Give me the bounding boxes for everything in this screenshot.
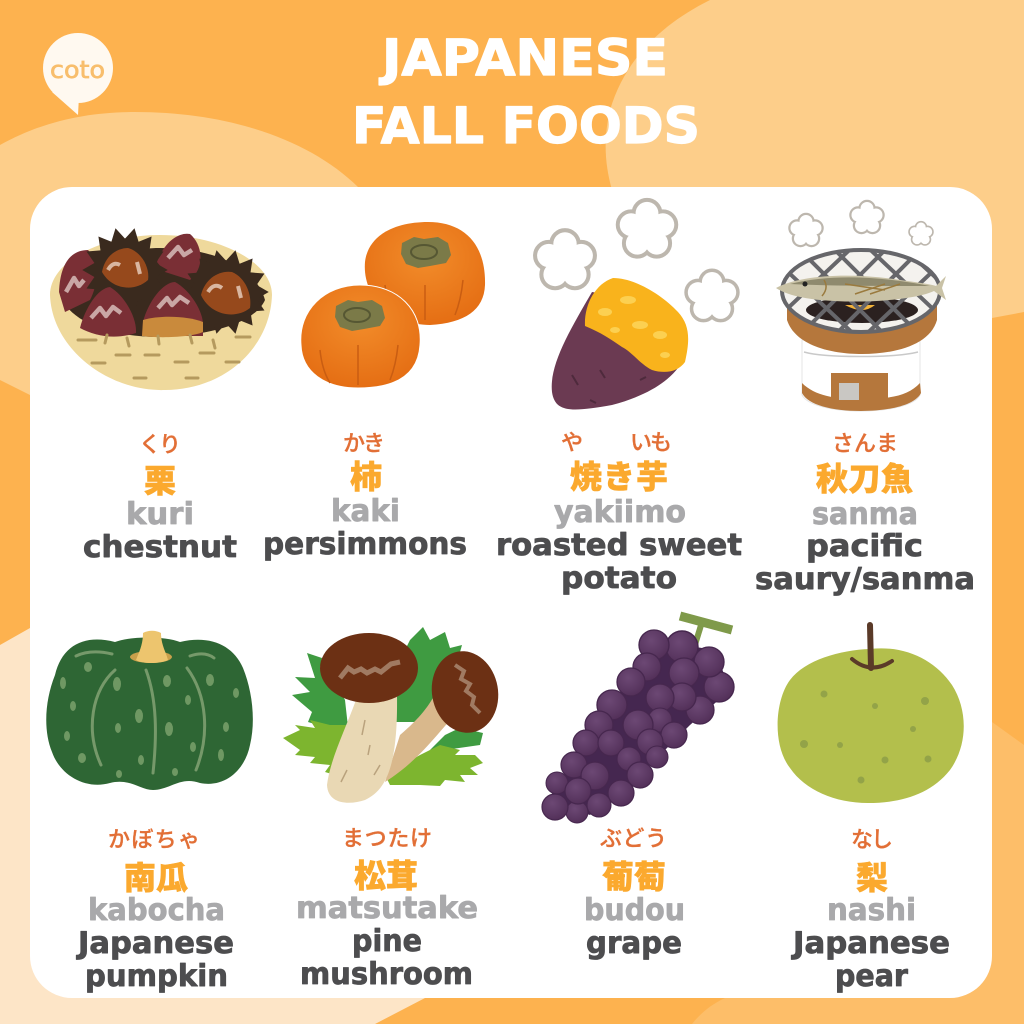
labels: sweet potato [496,430,742,596]
labels: persimmons: kaki [331,494,400,529]
icon: sweet potato with steam [537,202,736,410]
labels: grape: ぶどう [600,826,667,851]
item: pine mushroom [283,627,505,992]
labels: chestnut: くり [139,432,181,457]
labels: sweet potato: 焼き芋 [570,459,668,495]
labels: nashi: pear [835,959,908,994]
labels: matsutake: matsutake [296,891,478,926]
logo: coto speech bubble [43,33,113,115]
labels: persimmons [263,431,467,562]
labels: matsutake: まつたけ [342,826,432,851]
logo: coto speech bubble: coto [50,56,105,84]
labels: sweet potato: potato [561,561,677,596]
labels: nashi: nashi [827,893,916,928]
labels: pumpkin: pumpkin [85,959,228,994]
icon: sanma on shichirin grill [776,200,946,412]
labels: nashi: なし [851,827,893,852]
item: grape [542,616,734,961]
icon: two persimmons [301,222,485,388]
labels: grape: 葡萄 [602,859,666,895]
labels: matsutake [296,826,478,992]
icon: nashi pear [778,625,964,803]
labels: chestnut: kuri [126,497,194,532]
labels: matsutake: 松茸 [354,858,418,894]
title: FALL FOODS [352,97,700,155]
item: chestnut [50,228,272,565]
labels: sanma: sanma [812,497,918,532]
labels: sanma: さんま [832,431,898,456]
labels: pumpkin: kabocha [88,893,225,928]
item: persimmons [263,222,485,562]
labels: pumpkin [76,827,234,994]
labels: grape: grape [586,926,682,961]
labels: pumpkin: 南瓜 [124,860,188,896]
labels: persimmons: かき [343,431,385,456]
labels: matsutake: mushroom [300,957,473,992]
labels: nashi: 梨 [856,860,888,896]
labels: pumpkin: かぼちゃ [108,827,200,852]
labels: nashi: Japanese [791,926,950,961]
icon: bunch of grapes [542,616,734,823]
item: Japanese pumpkin [46,631,253,994]
labels: chestnut: 栗 [144,463,176,499]
labels: chestnut: chestnut [83,530,237,565]
title [352,29,700,155]
labels: sanma: saury/sanma [755,562,975,597]
labels: sanma: 秋刀魚 [816,461,913,497]
labels: sweet potato: いも [630,430,672,455]
labels: grape: budou [584,893,685,928]
item: pacific saury [755,202,975,597]
labels: sanma: pacific [806,529,923,564]
labels: grape [584,826,685,961]
icon: chestnut basket [50,228,272,390]
labels: sweet potato: や [561,430,583,455]
icon: kabocha pumpkin [46,631,253,790]
item: roasted sweet potato [496,202,742,596]
labels: nashi [791,827,950,994]
labels: sweet potato: yakiimo [554,495,686,530]
panel: white card [30,187,992,998]
labels: matsutake: pine [352,924,422,959]
title: JAPANESE [379,29,668,87]
labels: pumpkin: Japanese [76,926,234,961]
icon: matsutake mushrooms on leaves [283,627,505,803]
item: Japanese pear [778,625,964,994]
labels: sanma [755,431,975,597]
labels: persimmons: persimmons [263,527,467,562]
labels: chestnut [83,432,237,565]
labels: persimmons: 柿 [350,459,382,495]
labels: sweet potato: roasted sweet [496,528,742,563]
